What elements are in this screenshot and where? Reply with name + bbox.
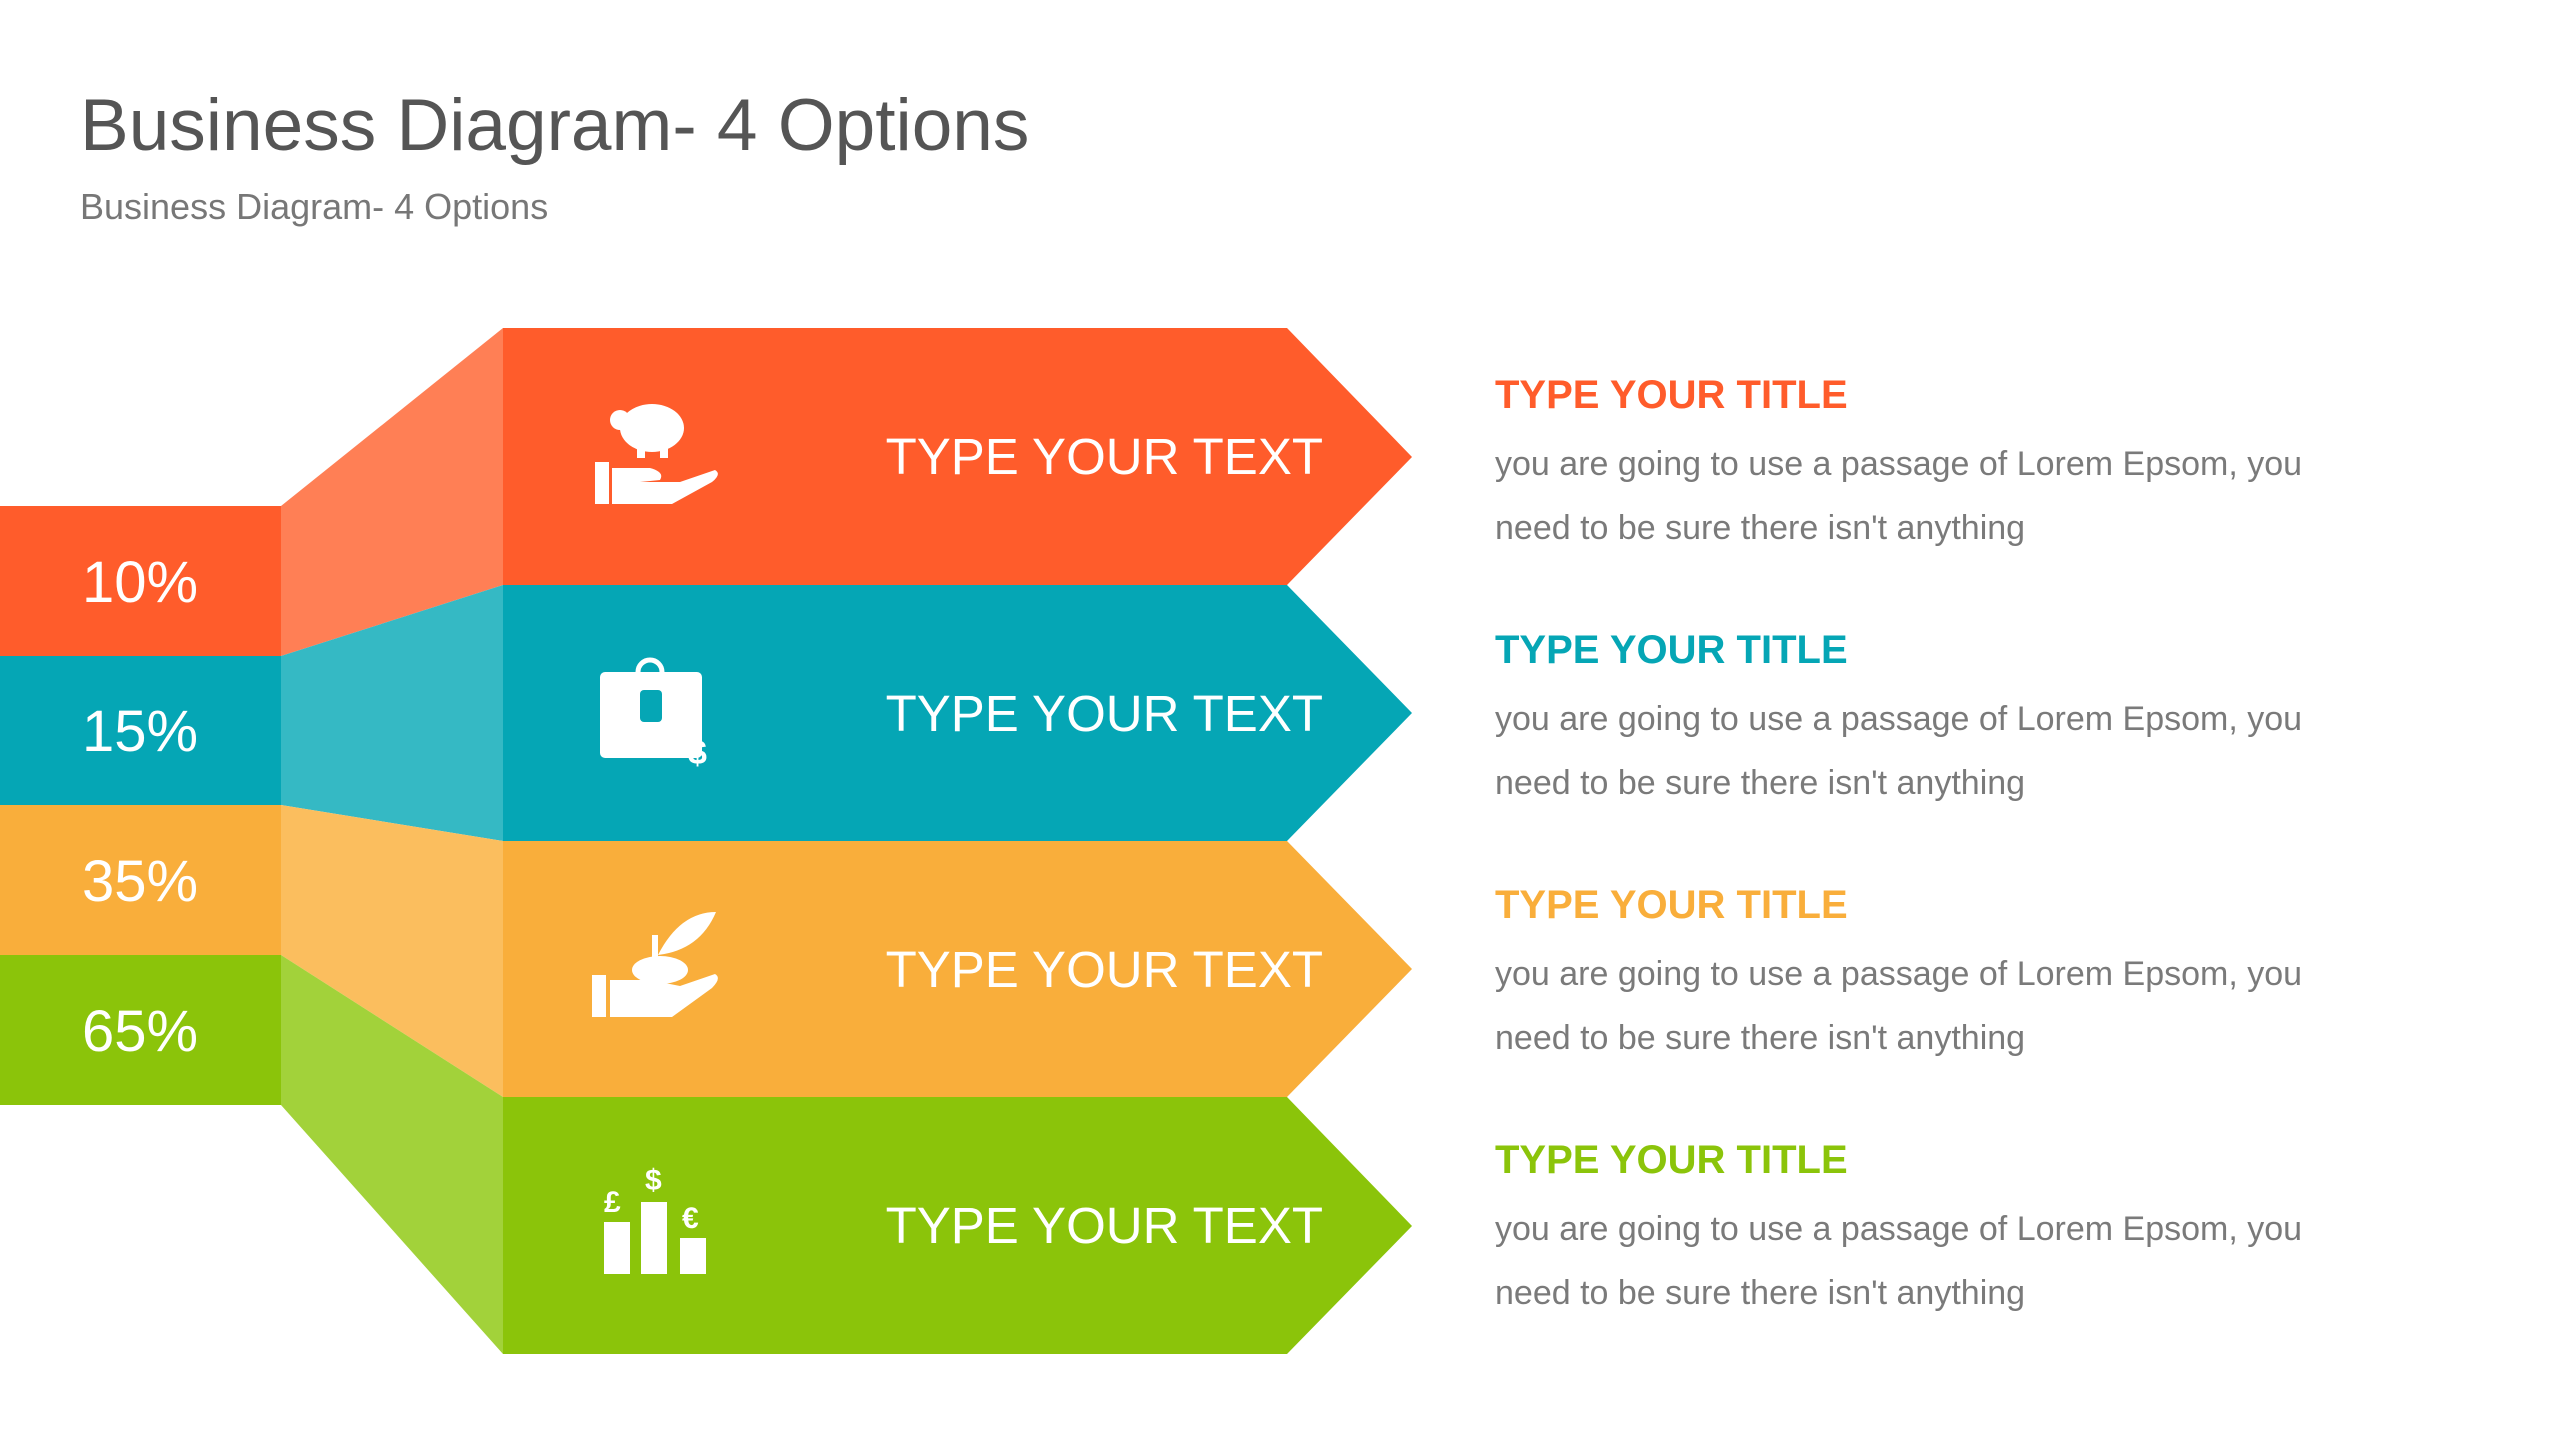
arrow 2	[503, 585, 1412, 841]
text block 4	[1495, 1138, 2302, 1312]
icon: currency bars: $	[645, 1164, 662, 1197]
text block 4: TYPE YOUR TITLE	[1495, 1138, 1848, 1182]
text block 1: you are going to use a passage of Lorem Epsom, you	[1495, 445, 2302, 483]
subtitle: Business Diagram- 4 Options	[80, 186, 548, 227]
icon: currency bars	[604, 1164, 706, 1274]
text block 3: TYPE YOUR TITLE	[1495, 883, 1848, 927]
connectors	[281, 328, 503, 1354]
arrow 2: TYPE YOUR TEXT	[886, 685, 1323, 742]
arrow 1: TYPE YOUR TEXT	[886, 428, 1323, 485]
text block 2: you are going to use a passage of Lorem Epsom, you	[1495, 700, 2302, 738]
text block 1	[1495, 373, 2302, 547]
icon: briefcase money: $	[688, 734, 707, 772]
icon: briefcase money	[600, 660, 707, 772]
text block 2	[1495, 628, 2302, 802]
icon: piggy bank hand	[595, 404, 718, 504]
arrow 4	[503, 1097, 1412, 1354]
percent bars: 65%	[82, 999, 198, 1064]
icon: currency bars: £	[604, 1186, 621, 1219]
title: Business Diagram- 4 Options	[80, 85, 1029, 166]
arrow 4: TYPE YOUR TEXT	[886, 1197, 1323, 1254]
arrow 3: TYPE YOUR TEXT	[886, 941, 1323, 998]
percent bars: 35%	[82, 849, 198, 914]
text block 4: need to be sure there isn't anything	[1495, 1274, 2025, 1312]
percent bars: 15%	[82, 699, 198, 764]
text block 4: you are going to use a passage of Lorem Epsom, you	[1495, 1210, 2302, 1248]
text block 1: need to be sure there isn't anything	[1495, 509, 2025, 547]
text block 3	[1495, 883, 2302, 1057]
text block 1: TYPE YOUR TITLE	[1495, 373, 1848, 417]
arrow 3	[503, 841, 1412, 1097]
text block 3: you are going to use a passage of Lorem Epsom, you	[1495, 955, 2302, 993]
icon: currency bars: €	[682, 1202, 699, 1235]
icon: plant hand	[592, 912, 718, 1017]
text block 2: TYPE YOUR TITLE	[1495, 628, 1848, 672]
text block 3: need to be sure there isn't anything	[1495, 1019, 2025, 1057]
percent bars	[0, 506, 281, 1105]
arrow 1	[503, 328, 1412, 585]
percent bars: 10%	[82, 550, 198, 615]
text block 2: need to be sure there isn't anything	[1495, 764, 2025, 802]
